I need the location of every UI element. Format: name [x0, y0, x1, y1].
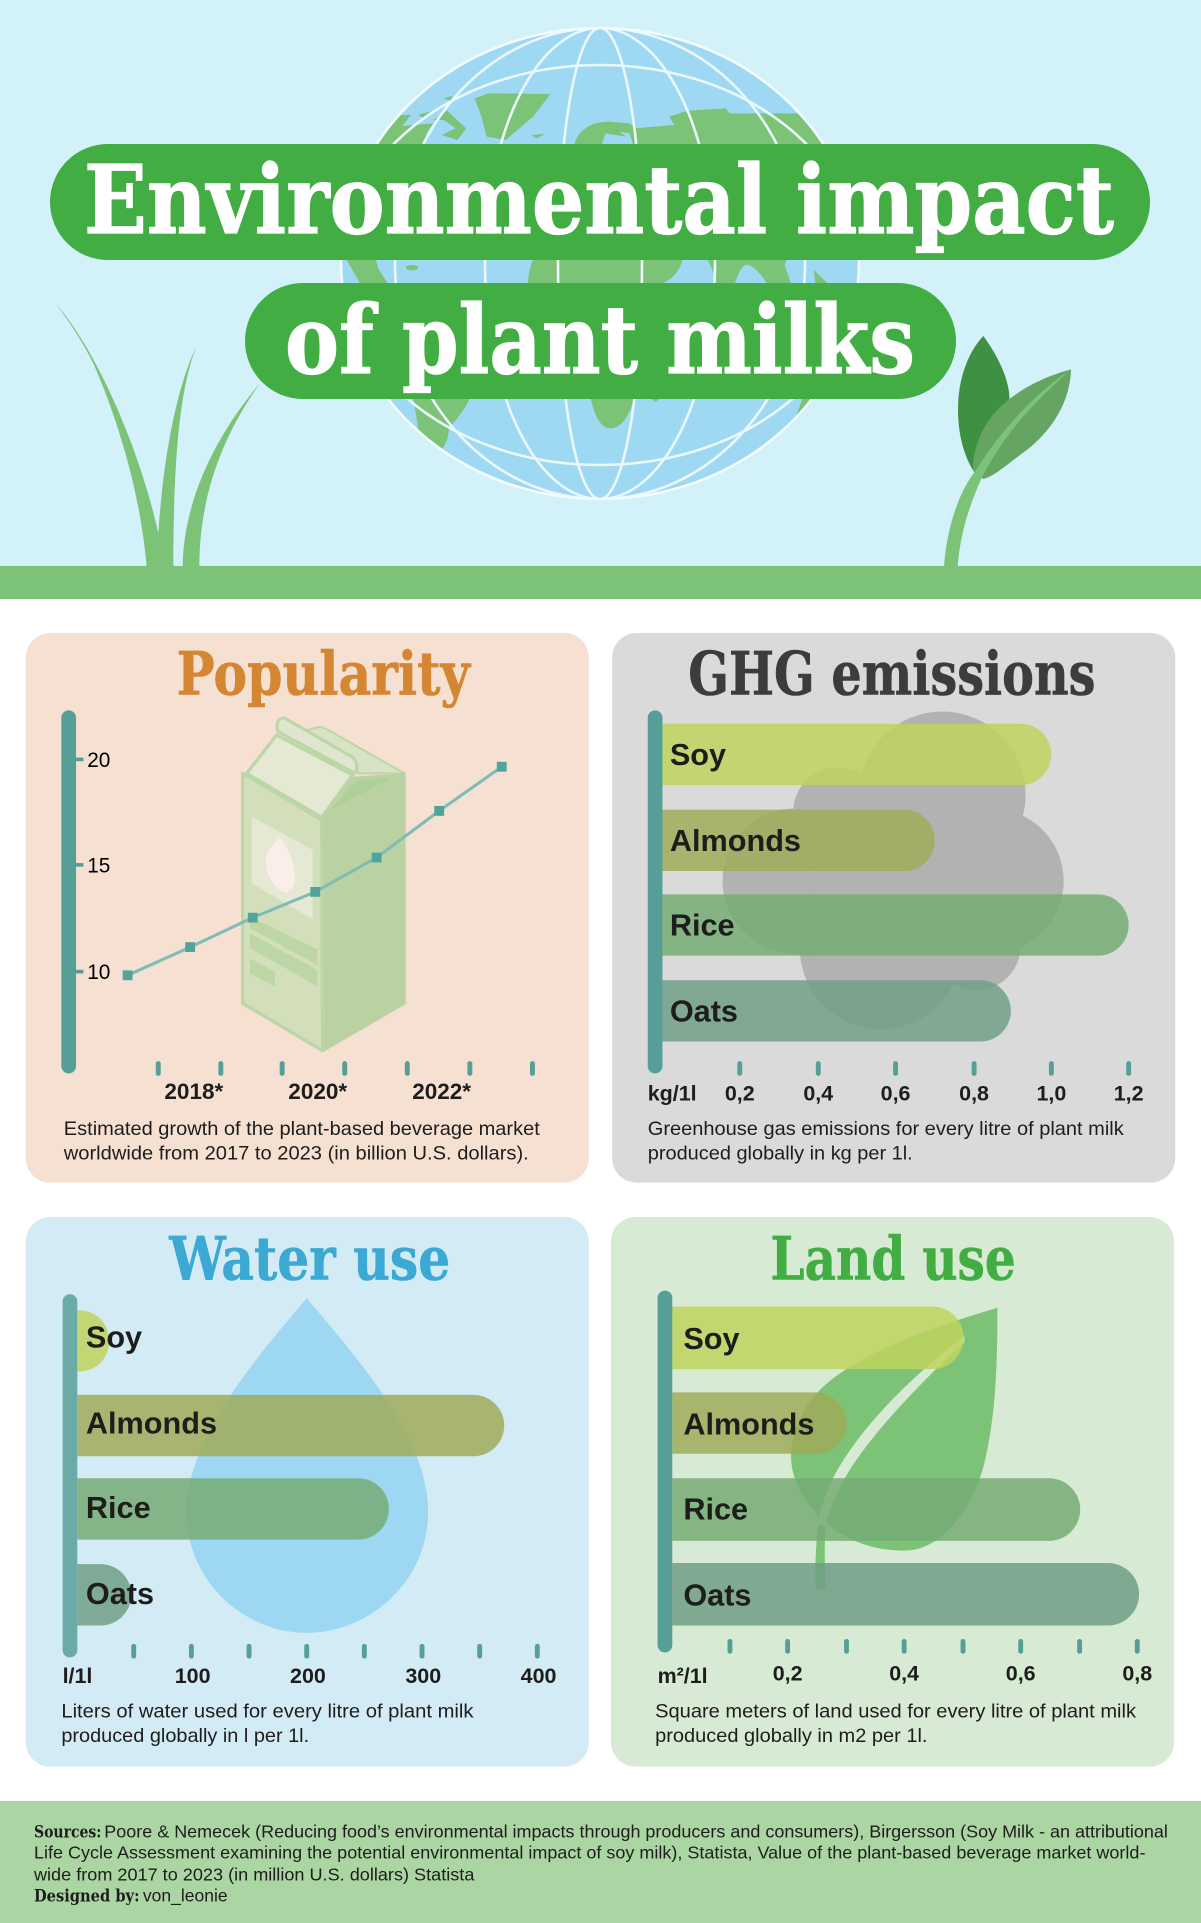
bar labels: Soy [86, 1321, 142, 1355]
bar labels [683, 1322, 814, 1612]
x axis: 2018* [164, 1079, 224, 1104]
bars [662, 724, 1129, 1042]
bars [77, 1310, 504, 1626]
icon: cloud [723, 712, 1064, 1029]
icon: globe [341, 28, 859, 499]
description: produced globally in kg per 1l. [648, 1142, 913, 1164]
panel: GHG emissions [612, 633, 1175, 1183]
x axis: 100 [175, 1664, 211, 1688]
description: Estimated growth of the plant-based beverage market [64, 1118, 540, 1140]
bar labels: Rice [86, 1491, 151, 1525]
x axis: 0,8 [959, 1081, 989, 1105]
x axis: 400 [521, 1664, 557, 1688]
footer: sources and credit: Sources: [34, 1822, 101, 1842]
heading: GHG emissions: GHG emissions [688, 639, 1096, 709]
y axis [63, 1294, 77, 1657]
description: produced globally in l per 1l. [61, 1725, 309, 1747]
header: sky background [0, 0, 1201, 566]
description [61, 1701, 474, 1747]
description [63, 1118, 540, 1164]
footer: sources and credit: wide from 2017 to 2023 (in million U.S. dollars) Statista [33, 1865, 475, 1885]
x axis [648, 1061, 1144, 1105]
bar labels: Almonds [86, 1407, 217, 1441]
line chart [123, 762, 507, 980]
footer: sources and credit: von_leonie [143, 1886, 228, 1907]
bar labels: Almonds [683, 1408, 814, 1442]
bars [670, 1307, 1139, 1626]
icon: milk carton [243, 718, 404, 1051]
heading: popularity: Popularity [177, 639, 472, 709]
x axis: 200 [290, 1664, 326, 1688]
bar labels: Rice [670, 908, 735, 942]
ground strip [0, 566, 1201, 599]
x axis: 1,2 [1114, 1081, 1144, 1105]
heading: water use: Water use [168, 1225, 450, 1295]
y axis [61, 710, 110, 1073]
x axis: 0,6 [881, 1081, 911, 1105]
bar labels: Soy [670, 738, 726, 772]
footer: sources and credit: Poore & Nemecek (Reducing food’s environmental impacts through producers and consumers), Birgersson (Soy Milk - an attributional [104, 1822, 1168, 1842]
bar labels: Oats [670, 994, 738, 1028]
description: Liters of water used for every litre of plant milk [61, 1701, 474, 1723]
x axis: 0,2 [773, 1662, 803, 1686]
bar labels: Rice [683, 1492, 748, 1526]
x axis [658, 1639, 1152, 1688]
x axis: 2020* [288, 1079, 348, 1104]
x axis: 0,4 [889, 1662, 919, 1686]
x axis: 0,6 [1006, 1662, 1036, 1686]
icon: water drop [186, 1298, 428, 1633]
bar labels: Oats [86, 1577, 154, 1611]
description [655, 1701, 1136, 1747]
x axis: l/1l [63, 1664, 92, 1688]
heading: land use: Land use [770, 1225, 1016, 1295]
bar labels: Oats [683, 1578, 751, 1612]
panel: water use [26, 1217, 589, 1767]
panel: land use [611, 1217, 1174, 1767]
icon: grass blades [56, 304, 260, 567]
description: Square meters of land used for every litre of plant milk [655, 1701, 1136, 1723]
footer: sources and credit [0, 1801, 1201, 1923]
x axis: 0,4 [803, 1081, 833, 1105]
x axis: 300 [405, 1664, 441, 1688]
description [648, 1118, 1124, 1164]
description: Greenhouse gas emissions for every litre of plant milk [648, 1118, 1124, 1140]
y axis: 20 [87, 749, 110, 772]
x axis [156, 1061, 535, 1104]
footer: sources and credit: Designed by: [34, 1886, 139, 1906]
y axis: 10 [87, 961, 110, 984]
icon: leaf [791, 1308, 997, 1591]
x axis: m²/1l [658, 1664, 708, 1688]
y axis [648, 710, 662, 1073]
description: produced globally in m2 per 1l. [655, 1725, 927, 1747]
bar labels: Almonds [670, 824, 801, 858]
x axis: 0,8 [1122, 1662, 1152, 1686]
icon: seedling [944, 336, 1071, 567]
bar labels: Soy [683, 1322, 740, 1356]
panel: popularity [26, 633, 589, 1183]
x axis: 2022* [412, 1079, 471, 1104]
y axis: 15 [87, 854, 110, 877]
description: worldwide from 2017 to 2023 (in billion U.S. dollars). [63, 1142, 529, 1164]
footer: sources and credit: Life Cycle Assessment examining the potential environmental impact of soy milk), Statista, Value of the plant-based beverage market world- [34, 1843, 1146, 1863]
x axis: kg/1l [648, 1081, 697, 1105]
bar labels [670, 738, 801, 1028]
x axis: 0,2 [725, 1081, 755, 1105]
x axis: 1,0 [1036, 1081, 1066, 1105]
x axis [63, 1644, 557, 1688]
title pill: second line: of plant milks [285, 285, 915, 396]
y axis [658, 1291, 672, 1652]
bar labels [86, 1321, 217, 1611]
